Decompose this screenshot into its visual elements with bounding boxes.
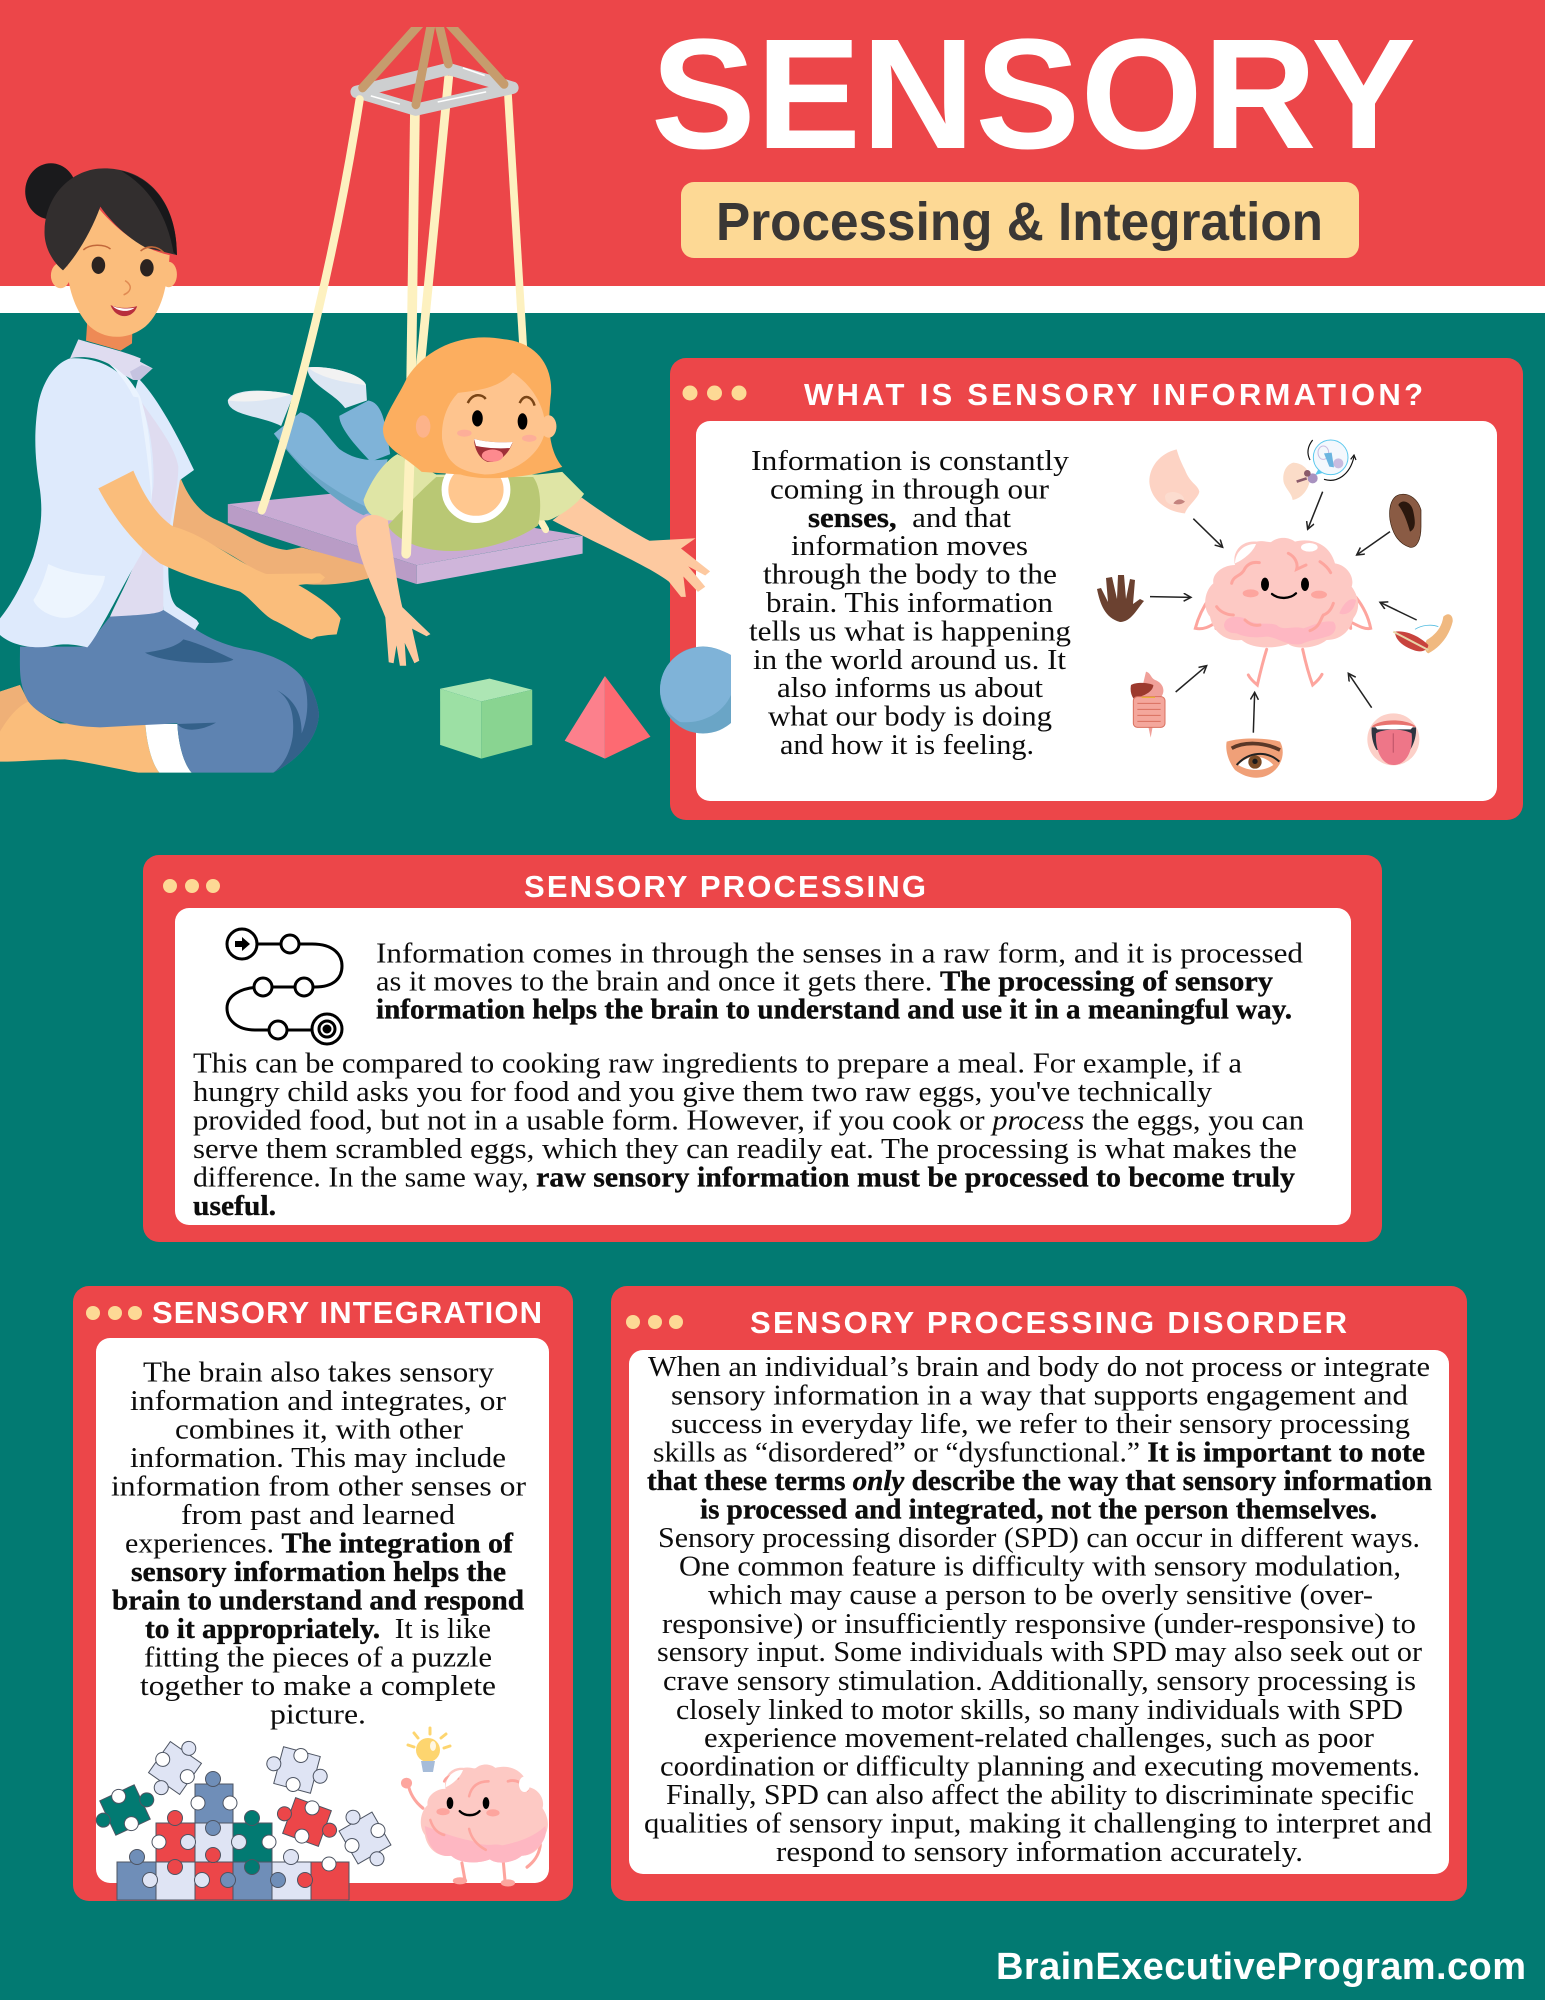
text block	[111, 1358, 527, 1730]
text block: information. This may include	[130, 1443, 506, 1474]
panel: sensory integration	[73, 1286, 573, 1901]
text block	[749, 446, 1071, 761]
icon: process path	[227, 929, 342, 1044]
text block: is processed and integrated, not the person themselves.	[700, 1495, 1377, 1526]
text block: picture.	[270, 1700, 366, 1730]
arrows	[1150, 492, 1417, 733]
icon: ear	[1390, 494, 1421, 547]
panel: what is sensory information	[670, 358, 1523, 820]
characters and toys	[25, 99, 710, 759]
heading: SENSORY PROCESSING	[524, 869, 926, 904]
icon: tongue	[1367, 713, 1419, 765]
text block: respond to sensory information accurately.	[776, 1837, 1303, 1868]
text block	[644, 1352, 1432, 1868]
text block: coordination or difficulty planning and executing movements.	[660, 1751, 1420, 1782]
icon: hand	[1097, 575, 1144, 622]
therapist body	[0, 320, 370, 773]
text block: as it moves to the brain and once it gets there. The processing of sensory	[376, 966, 1273, 997]
icon: brain character	[401, 1765, 548, 1886]
text block	[193, 938, 1304, 1222]
child body	[356, 454, 710, 666]
text block: senses, and that	[808, 503, 1011, 534]
icon: eye	[1226, 739, 1283, 778]
toy: sphere	[660, 646, 731, 734]
text block: sensory information in a way that supports engagement and	[671, 1380, 1408, 1412]
title: SENSORY	[651, 7, 1416, 182]
window dots	[163, 879, 220, 893]
header band	[0, 0, 1545, 313]
illustration: therapist, child on swing and toys	[0, 23, 710, 773]
text block: that these terms only describe the way that sensory information	[647, 1466, 1432, 1497]
heading: SENSORY PROCESSING DISORDER	[750, 1305, 1347, 1340]
icon: light bulb	[408, 1728, 450, 1772]
text block: success in everyday life, we refer to their sensory processing	[671, 1409, 1410, 1440]
text block: The brain also takes sensory	[143, 1358, 494, 1388]
icon: vestibular ear	[1283, 440, 1356, 500]
icon: nose	[1149, 449, 1199, 513]
window dots	[86, 1306, 142, 1320]
text block: what our body is doing	[768, 702, 1052, 733]
text block: from past and learned	[181, 1500, 455, 1531]
text block: brain. This information	[766, 588, 1053, 619]
subtitle pill: Processing & Integration	[716, 192, 1323, 252]
text block: experiences. The integration of	[125, 1528, 514, 1560]
text block: When an individual’s brain and body do not process or integrate	[648, 1352, 1430, 1383]
therapist legs	[0, 685, 192, 773]
text block: responsive) or insufficiently responsive (under-responsive) to	[662, 1609, 1416, 1640]
text block: to it appropriately. It is like	[145, 1614, 491, 1645]
text block: in the world around us. It	[753, 645, 1066, 676]
text block: skills as “disordered” or “dysfunctional.” It is important to note	[653, 1438, 1425, 1469]
therapist back arm	[172, 477, 370, 585]
text block: Finally, SPD can also affect the ability to discriminate specific	[666, 1780, 1414, 1811]
panel: sensory processing disorder	[611, 1286, 1467, 1901]
heading: SENSORY INTEGRATION	[152, 1295, 542, 1330]
text block: closely linked to motor skills, so many individuals with SPD	[676, 1695, 1403, 1726]
text block: sensory input. Some individuals with SPD may also seek out or	[657, 1637, 1423, 1668]
icon: muscle arm	[1393, 614, 1453, 653]
text block: serve them scrambled eggs, which they can readily eat. The processing is what makes the	[193, 1134, 1297, 1165]
icon: intestines	[1131, 672, 1165, 738]
text block: qualities of sensory input, making it challenging to interpret and	[644, 1808, 1432, 1840]
toy: cube	[440, 679, 532, 759]
text block: coming in through our	[770, 474, 1050, 505]
text block: information moves	[791, 531, 1028, 562]
child legs and shoes	[228, 367, 390, 515]
therapist skirt	[20, 610, 319, 773]
swing frame and platform	[228, 23, 583, 584]
text block: brain to understand and respond	[112, 1586, 524, 1616]
brain character with senses	[1097, 440, 1453, 778]
swing front ropes	[262, 99, 546, 530]
text block: together to make a complete	[140, 1671, 496, 1702]
text block: and how it is feeling.	[780, 730, 1034, 761]
text block: Sensory processing disorder (SPD) can occur in different ways.	[658, 1523, 1420, 1554]
text block: crave sensory stimulation. Additionally, sensory processing is	[663, 1666, 1416, 1697]
text block: information and integrates, or	[130, 1386, 507, 1417]
text block: through the body to the	[763, 560, 1057, 591]
text block: Information comes in through the senses in a raw form, and it is processed	[376, 938, 1303, 969]
therapist head	[25, 163, 177, 337]
senses diagram	[1131, 440, 1453, 778]
toy: pyramid	[565, 676, 650, 759]
text block: Information is constantly	[751, 446, 1069, 477]
text block: tells us what is happening	[749, 616, 1071, 647]
puzzle pieces	[88, 1730, 400, 1900]
footer url: BrainExecutiveProgram.com	[996, 1946, 1526, 1988]
text block: One common feature is difficulty with sensory modulation,	[679, 1552, 1401, 1583]
text block: experience movement-related challenges, such as poor	[704, 1723, 1375, 1754]
heading: WHAT IS SENSORY INFORMATION?	[804, 377, 1423, 412]
window dots	[682, 386, 746, 400]
panel: sensory processing	[143, 855, 1382, 1242]
therapist shirt	[0, 339, 199, 647]
text block: fitting the pieces of a puzzle	[144, 1642, 492, 1674]
text block: hungry child asks you for food and you give them two raw eggs, you've technically	[193, 1077, 1212, 1108]
text block: This can be compared to cooking raw ingredients to prepare a meal. For example, if a	[193, 1048, 1243, 1079]
text block: information from other senses or	[111, 1472, 527, 1502]
text block: which may cause a person to be overly sensitive (over-	[708, 1580, 1373, 1611]
text block: useful.	[193, 1191, 276, 1222]
text block: combines it, with other	[175, 1414, 464, 1446]
text block: also informs us about	[777, 673, 1043, 704]
therapist neck	[86, 324, 132, 351]
text block: sensory information helps the	[131, 1557, 506, 1588]
icon: brain	[1195, 538, 1371, 685]
text block: provided food, but not in a usable form. However, if you cook or process the eggs, you can	[193, 1105, 1304, 1136]
window dots	[626, 1315, 683, 1329]
therapist front arm	[98, 471, 341, 639]
text block: information helps the brain to understand and use it in a meaningful way.	[376, 994, 1292, 1025]
text block: difference. In the same way, raw sensory information must be processed to become truly	[193, 1162, 1295, 1193]
child head	[383, 337, 562, 478]
